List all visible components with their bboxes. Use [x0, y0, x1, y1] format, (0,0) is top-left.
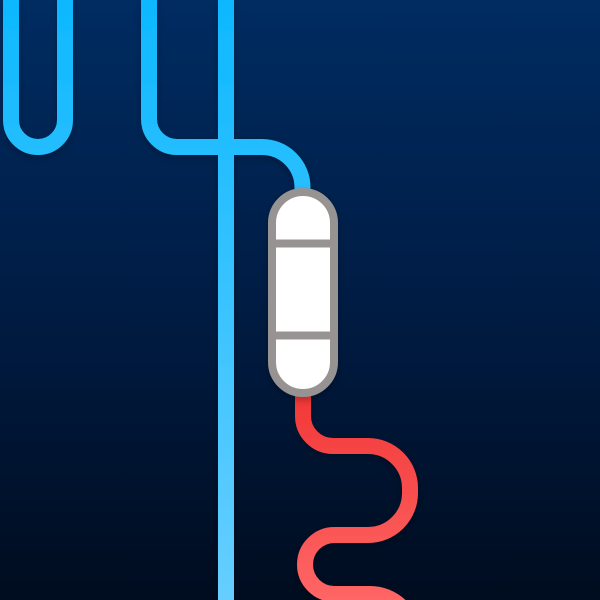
- capsule upper band: [272, 240, 334, 248]
- capsule body: [272, 192, 334, 393]
- U-shaped blue tube: [11, 0, 65, 147]
- blue tubes: [11, 0, 302, 600]
- capsule lower band: [272, 332, 334, 340]
- capsule: [272, 192, 334, 393]
- red serpentine tube: [303, 390, 410, 600]
- vertical blue line: [218, 0, 234, 600]
- blue tube into capsule: [149, 0, 302, 195]
